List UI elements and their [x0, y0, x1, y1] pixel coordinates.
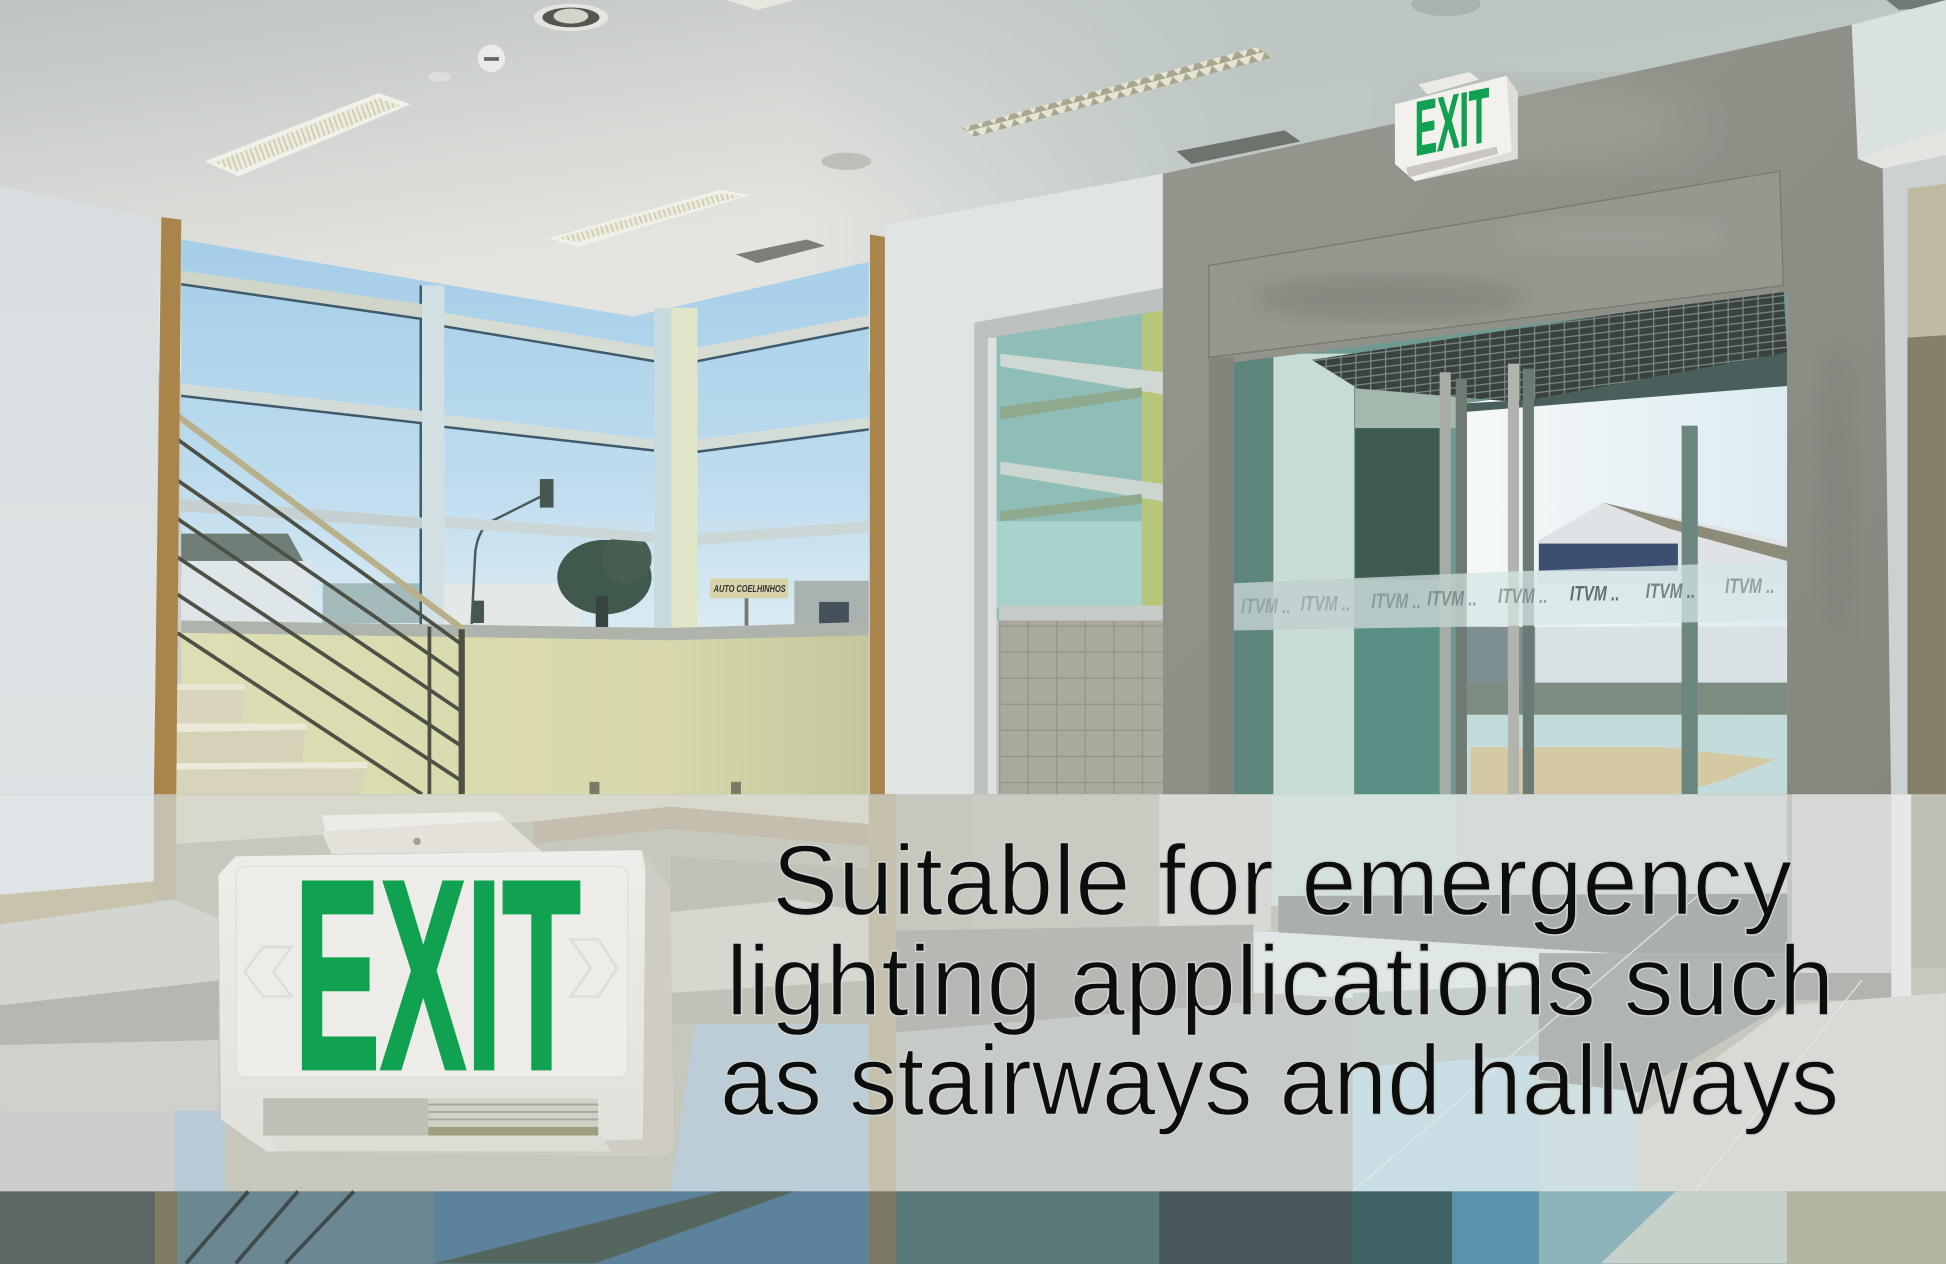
staircase steps [175, 684, 367, 794]
roadside sign [710, 578, 788, 625]
back wall and baseboard [175, 794, 869, 844]
roadside sign: AUTO COELHINHOS [713, 584, 786, 595]
caption text [720, 826, 1839, 1136]
wall below window [181, 633, 869, 819]
outside buildings [181, 534, 869, 629]
floor tile joints [1353, 894, 1862, 1263]
frosted band on glass: ITVM .. [1646, 580, 1695, 603]
stair railing [177, 416, 463, 794]
translucent caption band [0, 794, 1946, 1191]
caption text: lighting applications such [726, 926, 1834, 1037]
frosted band on glass: ITVM .. [1725, 575, 1775, 598]
wooden posts [154, 217, 885, 794]
concrete portal [1163, 25, 1891, 819]
traffic light [472, 479, 554, 624]
interior dark ceiling grid [1312, 288, 1787, 403]
window: sky and glazing [181, 240, 869, 640]
chevrons [245, 939, 617, 997]
sign mount [321, 812, 541, 854]
left wall [0, 186, 159, 943]
frosted band on glass: ITVM .. [1427, 588, 1477, 611]
tree [557, 534, 652, 629]
sign body [218, 850, 674, 1157]
large exit sign [218, 812, 674, 1157]
frosted band on glass: ITVM .. [1498, 585, 1548, 608]
interior wall [1272, 354, 1354, 819]
wall sockets [590, 782, 741, 794]
central floor patches [670, 794, 1946, 1191]
left floor patches [0, 900, 225, 1191]
right wall and door [1852, 0, 1946, 993]
caption text: as stairways and hallways [720, 1025, 1839, 1136]
lamp section [263, 1098, 428, 1136]
side glazed door [974, 288, 1163, 822]
small exit sign on the portal [1395, 72, 1518, 181]
door opening [1229, 288, 1787, 819]
small exit sign on the portal: EXIT [1415, 73, 1489, 173]
centre wall [885, 174, 1163, 819]
reflection of tree [1355, 428, 1440, 580]
sign face frame [236, 866, 628, 1077]
door handles [1440, 364, 1698, 794]
dark floor reflection strip [0, 1191, 1946, 1264]
caption text: Suitable for emergency [772, 826, 1792, 937]
ceiling fixtures [205, 0, 1946, 263]
ceiling [0, 0, 1946, 372]
floor [0, 794, 1946, 1264]
portal base in band [973, 794, 1159, 931]
frosted band on glass: ITVM .. [1241, 595, 1291, 618]
frosted band on glass: ITVM .. [1301, 593, 1350, 616]
frosted band on glass: ITVM .. [1570, 583, 1620, 606]
frosted band on glass [1234, 561, 1787, 630]
outdoor view [1464, 360, 1787, 794]
large exit sign: EXIT [294, 825, 581, 1127]
frosted band on glass: ITVM .. [1371, 590, 1421, 613]
window mullions [181, 271, 869, 640]
